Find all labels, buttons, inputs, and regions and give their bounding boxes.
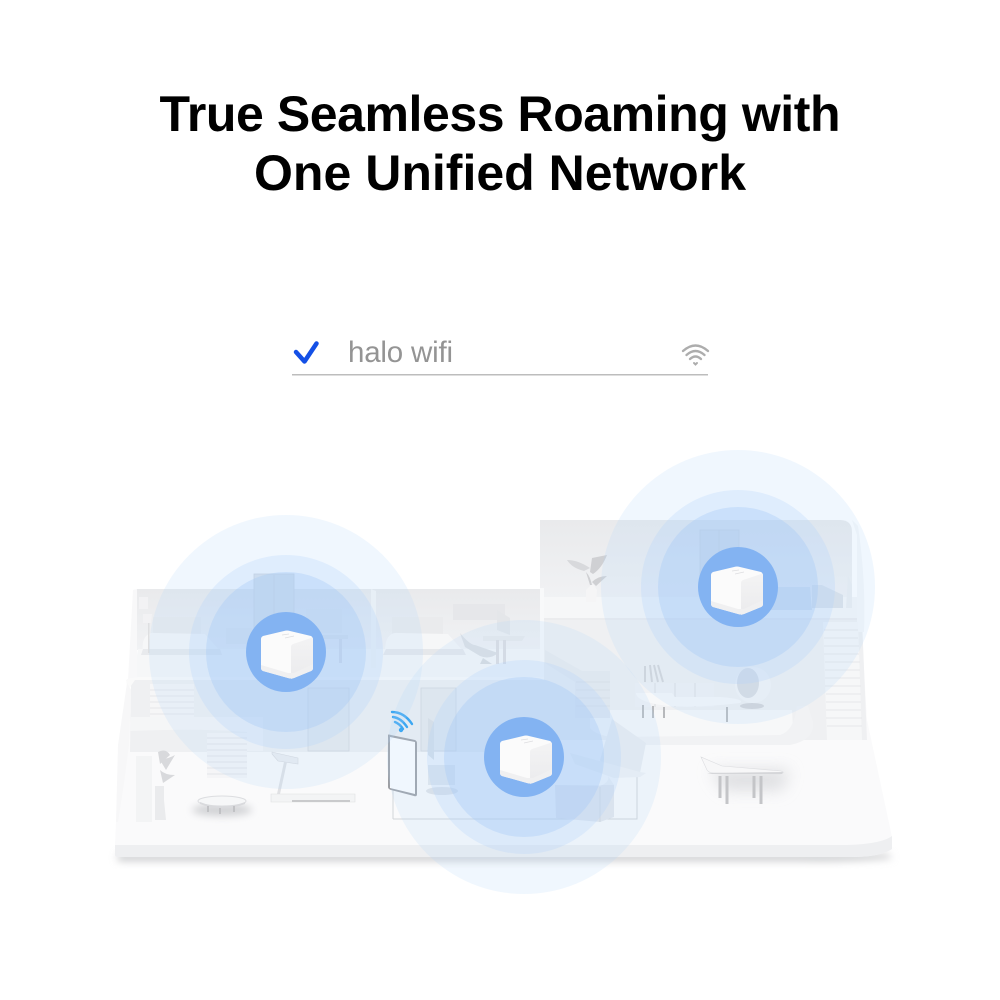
network name: halo wifi	[348, 336, 453, 369]
icon: grey wifi signal	[683, 346, 708, 364]
upper right back wall	[540, 520, 852, 600]
right side wall edge	[852, 520, 864, 632]
floor slab	[115, 600, 892, 857]
title: True Seamless Roaming with	[160, 86, 840, 142]
treadmill	[271, 752, 355, 802]
coverage: left unit	[149, 515, 423, 789]
middle staircase	[545, 650, 610, 718]
lower left floor	[116, 752, 544, 845]
coverage: bottom unit	[387, 620, 661, 894]
left stairs	[130, 684, 263, 778]
lounge sofa and table	[635, 665, 741, 722]
left bed	[141, 617, 222, 655]
floor lamp	[139, 597, 152, 653]
lower left wall	[130, 680, 544, 752]
dining table	[701, 757, 790, 804]
pillar	[136, 756, 152, 822]
right staircase	[823, 622, 862, 740]
TV desk	[226, 609, 348, 663]
TV in lower living room	[426, 718, 458, 795]
left plant	[155, 751, 175, 820]
title	[160, 86, 840, 201]
wardrobe right	[700, 530, 739, 590]
upper right ledge	[544, 597, 857, 618]
network selection row	[292, 336, 708, 376]
doors	[308, 688, 456, 751]
round table	[192, 796, 252, 816]
tablet device	[388, 712, 417, 796]
second bed	[383, 604, 505, 655]
icon: blue wifi on tablet	[392, 712, 412, 731]
chair and desk	[460, 610, 525, 664]
mesh unit right	[711, 566, 763, 615]
underline	[292, 374, 708, 376]
upper left floor	[133, 649, 544, 680]
lower right wall	[544, 620, 867, 740]
mesh unit left	[261, 630, 313, 679]
rug	[393, 760, 637, 819]
mesh unit bottom	[500, 736, 552, 784]
left wall	[128, 589, 137, 680]
room divider	[371, 589, 376, 668]
plant on ledge	[567, 555, 607, 602]
lower left side wall	[116, 683, 131, 822]
lounge platform	[590, 706, 813, 745]
coverage: right unit	[601, 450, 875, 724]
shadow under the floor	[118, 854, 892, 861]
title: One Unified Network	[254, 145, 746, 201]
home floor plan	[115, 520, 892, 861]
bed right	[765, 575, 852, 610]
sofa	[555, 719, 646, 822]
right column of upper left room	[540, 588, 544, 680]
wardrobe	[254, 574, 294, 636]
egg chair	[735, 667, 771, 709]
icon: blue check mark	[296, 344, 316, 362]
upper left back wall	[137, 589, 540, 650]
